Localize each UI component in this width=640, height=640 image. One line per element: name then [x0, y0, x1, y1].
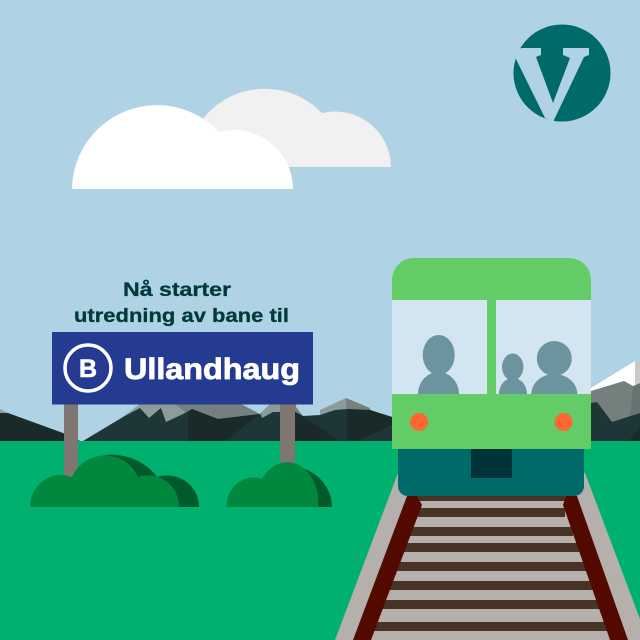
ground: [0, 441, 640, 640]
mountain: right snowy peak: [591, 361, 640, 441]
train cab: [392, 258, 591, 449]
left rail: [353, 496, 422, 640]
railway track: [335, 473, 640, 640]
headlight: left: [410, 413, 428, 431]
ballast: [335, 473, 640, 640]
mountains: left and centre range: [0, 398, 392, 441]
heading: utredning av bane til: [74, 306, 289, 327]
train lower body: [398, 440, 584, 496]
heading: Nå starter: [123, 280, 232, 301]
right window: [496, 300, 591, 394]
heading: [74, 280, 289, 327]
cloud: back grey: [186, 89, 391, 167]
headlight: right: [554, 413, 572, 431]
left window: [392, 300, 487, 394]
passenger: child: [499, 354, 527, 394]
sign board: [52, 332, 313, 404]
train: [392, 258, 591, 496]
icon: B circle: B: [79, 355, 97, 383]
bush: left: [30, 455, 199, 507]
sign posts: [64, 404, 295, 479]
sign name: Ullandhaug: [124, 353, 300, 386]
passenger: left: [418, 335, 459, 394]
icon: B circle: [65, 345, 111, 391]
cloud: front white: [72, 105, 293, 189]
coupling panel: [471, 449, 512, 478]
bush: right: [226, 462, 332, 507]
sleepers: [374, 496, 609, 631]
logo: V in circle: [514, 24, 610, 122]
passenger: right: [531, 341, 577, 394]
right rail: [563, 496, 628, 640]
